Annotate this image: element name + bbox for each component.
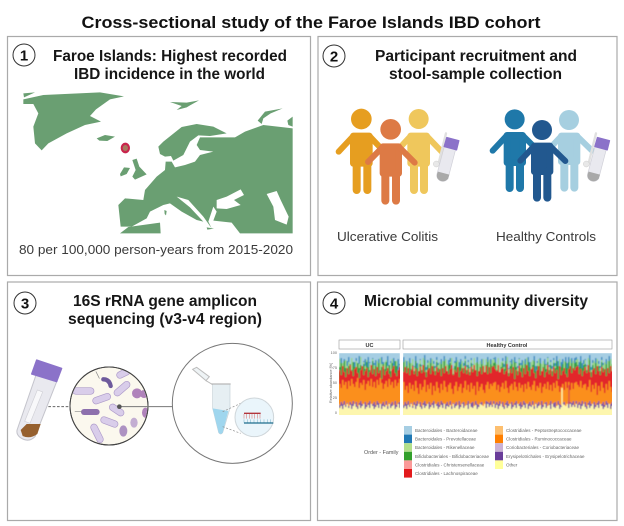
y axis: 50 <box>333 381 337 385</box>
facet strip: Healthy Control: Healthy Control <box>487 343 528 349</box>
panel 2: participant recruitment <box>318 36 617 276</box>
sample tube, ulcerative colitis <box>433 133 459 181</box>
legend: order and family: Other <box>506 462 518 468</box>
step number 3: 3 <box>21 296 29 312</box>
sequencing illustration <box>17 343 292 463</box>
label: Healthy Controls: Healthy Controls <box>496 229 597 244</box>
step number 1: 1 <box>20 48 28 64</box>
stacked bar chart: relative abundance <box>309 340 624 478</box>
step number 4: 4 <box>330 296 339 312</box>
PCR tube <box>193 367 231 434</box>
heading: panel 1: IBD incidence in the world <box>74 66 265 83</box>
facet strip: UC <box>339 340 400 349</box>
legend: order and family: Clostridiales - Lachnospiraceae <box>415 471 478 476</box>
connector line <box>119 405 173 408</box>
heading: panel 4: Microbial community diversity <box>364 293 588 310</box>
legend: order and family: Clostridiales - Ruminococcaceae <box>506 436 572 442</box>
caption: incidence: 80 per 100,000 person-years from 2015-2020 <box>19 242 293 257</box>
legend: order and family: Bacteroidales - Rikenellaceae <box>415 445 475 450</box>
legend: order and family: Bacteroidales - Bacteroidaceae <box>415 428 478 433</box>
y axis: 75 <box>333 366 337 370</box>
title: Cross-sectional study of the Faroe Islands IBD cohort <box>82 13 541 32</box>
bars: UC samples <box>339 353 400 415</box>
step number 1 <box>13 44 35 66</box>
sample tube, healthy controls <box>583 133 610 181</box>
amplicon inset <box>235 398 274 437</box>
legend: order and family <box>364 426 585 478</box>
facet strip: UC: UC <box>366 343 373 349</box>
bars: Healthy Control samples <box>403 353 612 415</box>
y axis: 100 <box>331 351 337 355</box>
person: mid blue <box>493 109 535 188</box>
legend: order and family: Clostridiales - Peptostreptococcaceae <box>506 428 582 433</box>
person: yellow <box>399 109 443 190</box>
legend: order and family: Order - Family <box>364 450 399 456</box>
heading: panel 3: 16S rRNA gene amplicon <box>73 293 257 310</box>
facet strip: Healthy Control <box>403 340 612 349</box>
heading: panel 3: sequencing (v3-v4 region) <box>68 311 262 328</box>
y axis: 0 <box>335 411 337 415</box>
step number 2 <box>323 45 345 67</box>
step number 4 <box>323 292 345 314</box>
y axis: 25 <box>333 396 337 400</box>
step number 2: 2 <box>330 48 338 66</box>
legend: order and family: Erysipelotrichales - Erysipelotrichaceae <box>506 454 585 459</box>
heading: panel 2: Participant recruitment and <box>375 48 577 65</box>
y axis: Relative abundance [%] <box>329 363 333 403</box>
label: Ulcerative Colitis: Ulcerative Colitis <box>337 229 439 244</box>
person: pale blue <box>551 110 592 188</box>
magnifier: PCR tube and amplicon <box>172 343 292 463</box>
panel 1: Faroe Islands incidence <box>8 36 310 276</box>
legend: order and family: Bifidobacteriales - Bifidobacteriaceae <box>415 454 490 459</box>
legend: order and family: Coriobacteriales - Coriobacteriaceae <box>506 445 580 450</box>
heading: panel 2: stool-sample collection <box>389 66 562 83</box>
stool sample tube <box>17 360 62 440</box>
legend: order and family: Clostridiales - Christensenellaceae <box>415 462 485 468</box>
heading: panel 1: Faroe Islands: Highest recorded <box>53 48 287 65</box>
people and sample illustrations <box>339 109 610 201</box>
person: gold <box>339 109 382 190</box>
panel 4: microbial community diversity <box>309 282 624 520</box>
y axis <box>329 351 337 415</box>
person: orange <box>368 119 415 201</box>
legend: order and family: Bacteroidales - Prevotellaceae <box>415 436 477 442</box>
panel 3: 16S rRNA sequencing <box>8 282 624 520</box>
magnifier: gut bacteria <box>70 367 149 445</box>
step number 3 <box>14 292 36 314</box>
map of the North Atlantic and Europe <box>23 92 293 233</box>
dotted connector <box>48 405 70 408</box>
person: dark blue <box>520 120 565 198</box>
